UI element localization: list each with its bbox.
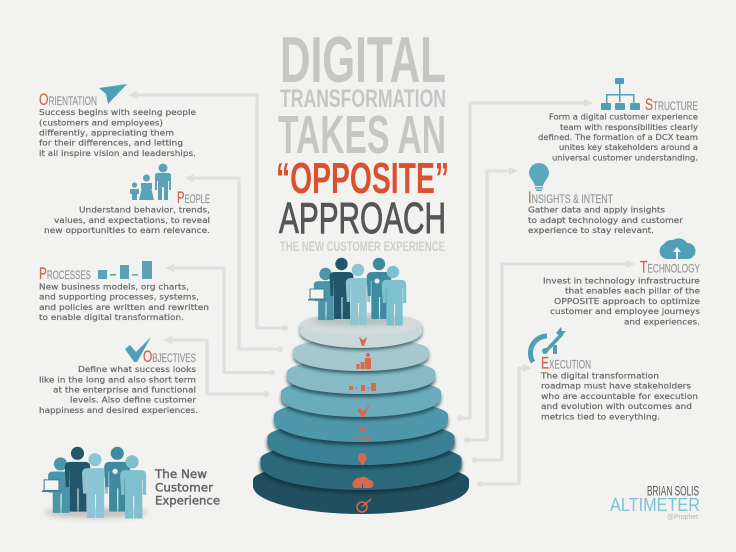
icon: target with arrow xyxy=(530,327,566,362)
text: structure body: team with responsibilities clearly xyxy=(560,122,698,132)
heading: technology: TECHNOLOGY xyxy=(640,258,700,277)
heading: people: PEOPLE xyxy=(177,188,210,207)
icon: tier check xyxy=(357,404,370,417)
heading: objectives: OBJECTIVES xyxy=(143,347,196,366)
text: technology body: customer and employee journeys xyxy=(550,306,700,316)
text: objectives body: Define what success looks xyxy=(78,364,196,374)
text: processes body: and supporting processes, systems, xyxy=(39,292,199,302)
icon: paper plane xyxy=(99,84,127,104)
title: THE NEW CUSTOMER EXPERIENCE xyxy=(280,238,445,254)
text: orientation body: it all inspire vision and leaderships. xyxy=(39,148,196,158)
text: execution body: who are accountable for execution xyxy=(541,391,698,401)
heading: processes: PROCESSES xyxy=(39,264,91,283)
text: insights body: to adapt technology and customer xyxy=(528,215,684,225)
text: structure body: universal customer understanding. xyxy=(552,152,698,162)
icon: customer group on pyramid xyxy=(308,258,406,325)
panel: processes xyxy=(39,261,209,322)
text: objectives body: happiness and desired experiences. xyxy=(39,405,198,415)
text: objectives body xyxy=(39,364,198,415)
panel: people xyxy=(44,164,210,235)
text: prophet: @Prophet xyxy=(667,514,698,521)
title: “OPPOSITE” xyxy=(276,154,449,203)
connector: objectives xyxy=(163,336,269,397)
icon: org chart xyxy=(601,78,640,110)
text: people body xyxy=(44,205,210,235)
text: objectives body: at the enterprise and functional xyxy=(53,384,196,394)
text: structure body: unites key stakeholders around a xyxy=(559,142,698,152)
panel: execution xyxy=(530,327,698,422)
panel: technology xyxy=(543,238,700,326)
icon: tier structure xyxy=(356,428,371,439)
text: technology body: that enables each pillar of the xyxy=(565,286,700,296)
tier 5: structure xyxy=(274,400,448,445)
heading: structure: STRUCTURE xyxy=(645,95,698,114)
connector: orientation xyxy=(128,91,288,331)
tier 1: orientation xyxy=(300,313,422,350)
tier 2: people xyxy=(294,338,428,374)
icon: tier cloud xyxy=(352,477,374,488)
panel: structure xyxy=(538,78,698,162)
text: structure body: defined. The formation of a DCX team xyxy=(538,132,698,142)
icon: customer group xyxy=(42,447,146,518)
icon: process blocks xyxy=(98,261,152,279)
icon: tier bulb xyxy=(358,453,367,466)
title: TRANSFORMATION xyxy=(280,85,446,113)
title xyxy=(276,23,449,254)
text: structure body xyxy=(538,112,698,162)
text: people body: Understand behavior, trends, xyxy=(79,205,210,215)
text: technology body: Invest in technology infrastructure xyxy=(543,275,700,285)
text: objectives body: like in the long and also short term xyxy=(39,374,196,384)
text: execution body: roadmap must have stakeholders xyxy=(541,380,691,390)
text: technology body xyxy=(543,275,700,326)
text: technology body: OPPOSITE approach to optimize xyxy=(554,296,700,306)
connector: people xyxy=(185,174,283,352)
text: execution body: metrics tied to everything. xyxy=(541,412,660,422)
text: people body: values, and expectations, to reveal xyxy=(54,215,210,225)
text: insights body: Gather data and apply insights xyxy=(528,205,665,215)
connector: structure xyxy=(457,99,593,421)
text: processes body: and policies are written and rewritten xyxy=(39,302,209,312)
text: legend label: Experience xyxy=(155,494,220,508)
tier 3: processes xyxy=(287,359,435,397)
heading: execution: EXECUTION xyxy=(541,354,591,373)
text: orientation body: differently, appreciating them xyxy=(39,128,174,138)
connector: insights xyxy=(464,167,518,443)
icon: family xyxy=(130,164,171,200)
text: processes body xyxy=(39,281,209,322)
icon: tier people xyxy=(356,353,371,369)
text: processes body: New business models, org charts, xyxy=(39,281,189,291)
tier 8: execution xyxy=(253,462,469,514)
tier 6: insights xyxy=(267,421,455,468)
text: people body: new opportunities to earn relevance. xyxy=(44,225,210,235)
text: orientation body: for their differences, and letting xyxy=(39,138,183,148)
title: APPROACH xyxy=(279,194,446,243)
text: insights body xyxy=(528,205,684,235)
pyramid of stacked discs xyxy=(253,313,469,514)
panel: orientation xyxy=(39,84,196,158)
connector: execution xyxy=(477,364,532,487)
text: execution body xyxy=(540,370,698,422)
text: legend label: Customer xyxy=(155,480,213,494)
legend: the new customer experience xyxy=(42,447,220,518)
icon: tier processes xyxy=(349,383,376,391)
tier 4: objectives xyxy=(281,378,441,420)
panel: objectives xyxy=(39,337,198,415)
credit xyxy=(610,484,700,521)
icon: cloud upload xyxy=(660,238,696,259)
title: DIGITAL xyxy=(280,23,446,96)
text: orientation body: Success begins with seeing people xyxy=(39,107,196,117)
text: legend label xyxy=(154,467,220,508)
panel: insights and intent xyxy=(528,163,684,235)
title: TAKES AN xyxy=(278,105,446,165)
text: legend label: The New xyxy=(154,467,207,481)
text: execution body: and evolution with outcomes and xyxy=(541,401,692,411)
text: processes body: to enable digital transformation. xyxy=(39,312,184,322)
text: insights body: experience to stay relevant. xyxy=(528,225,654,235)
text: execution body: The digital transformation xyxy=(540,370,659,380)
heading: orientation: ORIENTATION xyxy=(39,90,97,109)
text: author: BRIAN SOLIS xyxy=(647,484,699,498)
heading: insights and intent: INSIGHTS & INTENT xyxy=(528,188,613,207)
connector: technology xyxy=(472,260,635,463)
tier 7: technology xyxy=(260,442,462,493)
text: structure body: Form a digital customer experience xyxy=(549,112,698,122)
connector: processes xyxy=(165,264,275,376)
icon: tier arrow xyxy=(359,337,367,346)
icon: check mark xyxy=(125,337,151,362)
icon: tier target xyxy=(357,499,371,512)
text: orientation body xyxy=(39,107,196,158)
text: technology body: and experiences. xyxy=(624,316,700,326)
text: objectives body: levels. Also define customer xyxy=(70,395,197,405)
icon: light bulb xyxy=(529,163,549,191)
text: orientation body: (customers and employees) xyxy=(39,117,163,127)
text: altimeter logo: ALTIMETER xyxy=(610,495,700,515)
